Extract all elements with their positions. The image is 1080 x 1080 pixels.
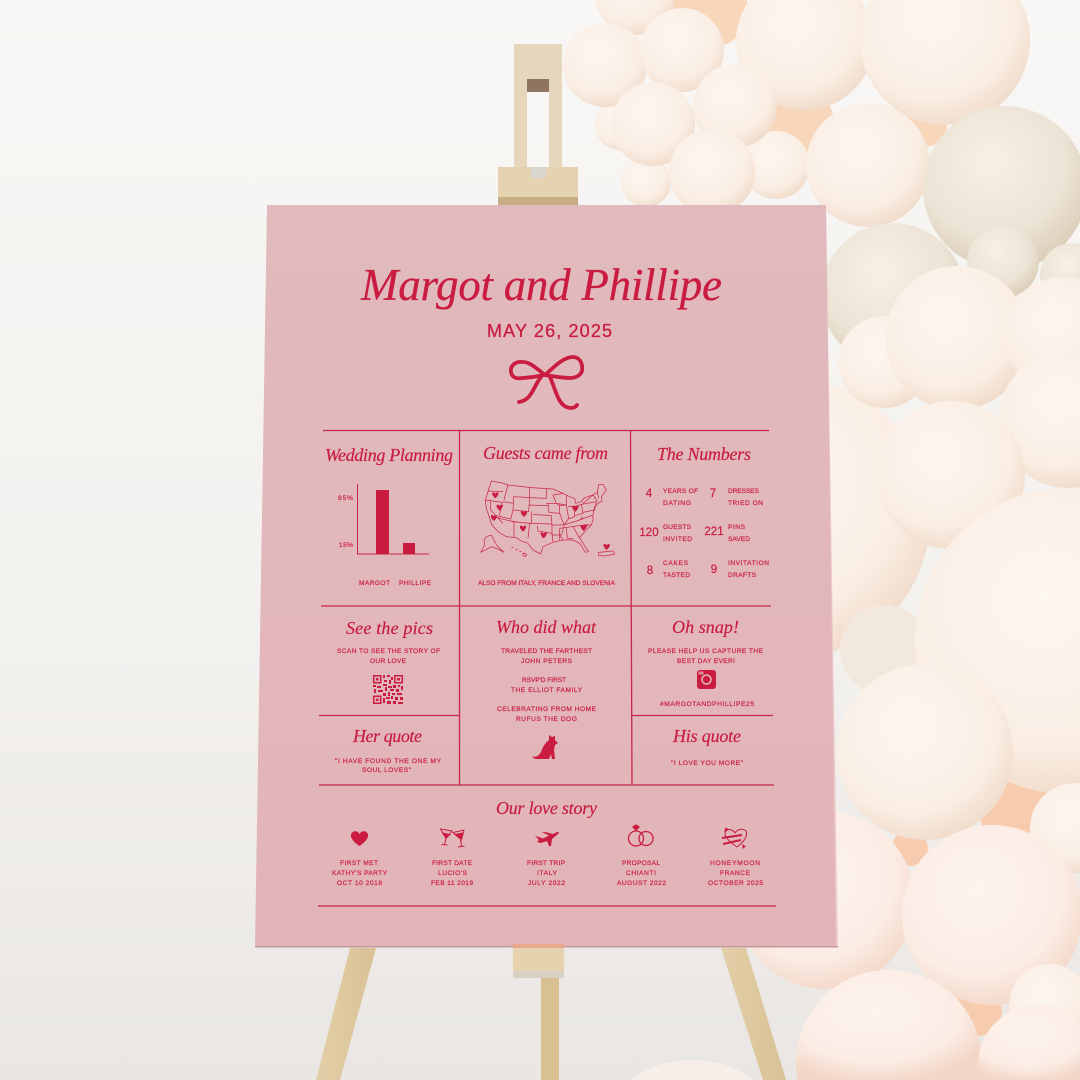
stat: guests invited: INVITED: [663, 536, 692, 543]
panel: who did what: [496, 617, 597, 759]
panel: the numbers: [639, 444, 769, 579]
timeline: honeymoon: OCTOBER 2025: [708, 880, 763, 887]
timeline: proposal: CHIANTI: [626, 870, 656, 877]
stat: pins saved: PINS: [728, 524, 746, 531]
easel legs: [316, 948, 786, 1080]
heading: her quote: Her quote: [352, 726, 422, 746]
timeline: first trip: ITALY: [537, 870, 558, 877]
panel: guests came from: [478, 443, 616, 587]
stat: invitation drafts: [711, 560, 769, 579]
timeline: honeymoon: FRANCE: [720, 870, 751, 877]
timeline: first met: FIRST MET: [340, 860, 378, 867]
stat: years of dating: 4: [646, 488, 653, 500]
heading: wedding planning: Wedding Planning: [325, 445, 453, 465]
text: scan instruction: OUR LOVE: [370, 658, 407, 665]
easel centre block: [513, 944, 564, 978]
bar chart: 15%: [339, 542, 353, 549]
heading: our love story: Our love story: [496, 798, 597, 818]
text: rsvp'd first: [511, 677, 583, 694]
text: traveled the farthest: [501, 648, 592, 665]
stat: pins saved: SAVED: [728, 536, 750, 543]
icon: QR code: [373, 675, 403, 704]
timeline: proposal: [617, 825, 666, 887]
text: capture request: PLEASE HELP US CAPTURE THE: [648, 648, 764, 655]
timeline: first met: [332, 831, 388, 887]
bar chart: 85%: [338, 495, 353, 502]
icon: wedding rings: [628, 825, 653, 846]
icon: heart with ribbon: [722, 828, 747, 848]
text: hashtag: #MARGOTANDPHILLIPE25: [660, 701, 754, 708]
timeline: honeymoon: [708, 828, 763, 887]
stat: guests invited: [639, 524, 692, 543]
grid lines: [318, 430, 776, 906]
stat: guests invited: 120: [639, 527, 659, 539]
caption: also from: ALSO FROM ITALY, FRANCE AND SLOVENIA: [478, 580, 616, 587]
timeline: first trip: JULY 2022: [528, 880, 565, 887]
pink sign board: [255, 205, 838, 948]
text: capture request: [648, 648, 764, 665]
stat: invitation drafts: DRAFTS: [728, 572, 757, 579]
heading: guests came from: Guests came from: [483, 443, 608, 463]
timeline: honeymoon: HONEYMOON: [710, 860, 760, 867]
icon: bow: [511, 357, 582, 408]
heading: the numbers: The Numbers: [657, 444, 751, 464]
text: her quote: SOUL LOVES": [362, 767, 412, 774]
timeline: first met: KATHY'S PARTY: [332, 870, 388, 877]
stat: pins saved: [704, 524, 750, 543]
easel top clamp: [498, 44, 578, 205]
title: Margot and Phillipe: [360, 260, 722, 310]
bar chart: MARGOT: [359, 580, 390, 587]
timeline: first trip: FIRST TRIP: [527, 860, 566, 867]
heading: his quote: His quote: [672, 726, 741, 746]
timeline: first date: FEB 11 2019: [431, 880, 473, 887]
balloon garland: [563, 0, 1080, 1080]
stat: dresses tried on: [710, 488, 763, 507]
stat: years of dating: DATING: [663, 500, 691, 507]
text: her quote: "I HAVE FOUND THE ONE MY: [335, 758, 442, 765]
timeline: first date: LUCIO'S: [438, 870, 468, 877]
text: rsvp'd first: THE ELLIOT FAMILY: [511, 687, 583, 694]
text: scan instruction: SCAN TO SEE THE STORY OF: [337, 648, 440, 655]
icon: dog: [532, 735, 558, 759]
text: celebrating from home: CELEBRATING FROM HOME: [497, 706, 597, 713]
timeline: proposal: PROPOSAL: [622, 860, 660, 867]
panel: wedding planning: [325, 445, 453, 587]
text: her quote: [335, 758, 442, 774]
stat: cakes tasted: [647, 560, 690, 579]
text: traveled the farthest: TRAVELED THE FARTHEST: [501, 648, 592, 655]
stat: guests invited: GUESTS: [663, 524, 692, 531]
text: rsvp'd first: RSVP'D FIRST: [522, 677, 566, 684]
text: traveled the farthest: JOHN PETERS: [521, 658, 573, 665]
panel: see the pics: [337, 618, 440, 704]
stat: dresses tried on: TRIED ON: [728, 500, 763, 507]
text: celebrating from home: RUFUS THE DOG: [516, 716, 577, 723]
heading: who did what: Who did what: [496, 617, 597, 637]
icon: cocktail glasses: [440, 829, 464, 847]
icon: plane: [535, 832, 559, 846]
icon: heart: [351, 831, 368, 846]
map of the USA with hearts: [481, 481, 615, 557]
timeline: first date: FIRST DATE: [432, 860, 473, 867]
stat: dresses tried on: 7: [710, 488, 716, 500]
bar chart: [338, 484, 432, 587]
timeline: proposal: AUGUST 2022: [617, 880, 666, 887]
text: his quote: "I LOVE YOU MORE": [671, 760, 744, 767]
stat: dresses tried on: DRESSES: [728, 488, 760, 495]
heading: see the pics: See the pics: [346, 618, 433, 638]
timeline: first date: [431, 829, 473, 887]
timeline: first trip: [527, 832, 566, 887]
panel: our love story: [332, 798, 763, 887]
stat: cakes tasted: 8: [647, 565, 653, 577]
text: celebrating from home: [497, 706, 597, 723]
panel: his quote: [671, 726, 744, 767]
icon: camera: [697, 670, 716, 689]
stat: invitation drafts: 9: [711, 564, 717, 576]
stat: cakes tasted: TASTED: [663, 572, 690, 579]
panel: oh snap: [648, 617, 764, 708]
stat: invitation drafts: INVITATION: [728, 560, 769, 567]
heading: oh snap: Oh snap!: [672, 617, 739, 637]
stat: years of dating: YEARS OF: [663, 488, 698, 495]
panel: her quote: [335, 726, 442, 774]
timeline: first met: OCT 10 2018: [337, 880, 382, 887]
stat: cakes tasted: CAKES: [663, 560, 689, 567]
stat: years of dating: [646, 488, 698, 507]
text: capture request: BEST DAY EVER!: [677, 658, 735, 665]
stat: pins saved: 221: [704, 526, 724, 538]
text: scan instruction: [337, 648, 440, 665]
date: MAY 26, 2025: [487, 321, 612, 341]
bar chart: PHILLIPE: [399, 580, 432, 587]
